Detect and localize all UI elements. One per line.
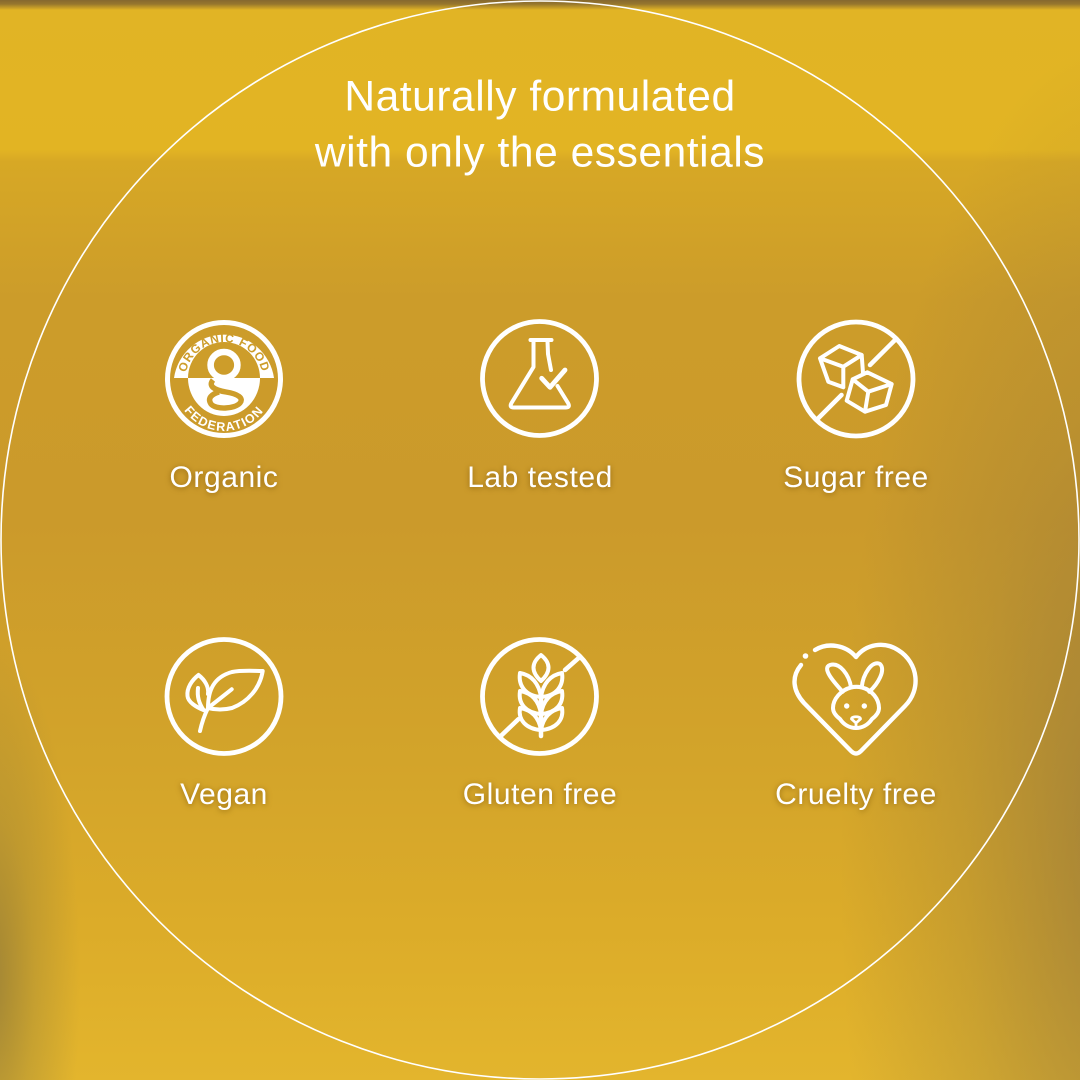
label: lab tested: Lab tested bbox=[467, 461, 613, 494]
icon: leaf bbox=[167, 640, 281, 754]
label: gluten free: Gluten free bbox=[463, 778, 617, 811]
label: sugar free: Sugar free bbox=[783, 461, 929, 494]
title bbox=[314, 74, 765, 176]
icon: flask with check bbox=[482, 322, 596, 436]
icon: crossed wheat bbox=[482, 640, 596, 754]
item: vegan bbox=[167, 640, 281, 811]
icon: organic food federation seal: ORGANIC FOOD bbox=[179, 334, 269, 372]
label: organic: Organic bbox=[170, 461, 278, 494]
label: cruelty free: Cruelty free bbox=[775, 778, 937, 811]
title: Naturally formulated bbox=[344, 74, 736, 120]
icon: organic food federation seal bbox=[165, 320, 283, 438]
item: sugar free bbox=[783, 322, 929, 494]
item: cruelty free bbox=[775, 645, 937, 811]
title: with only the essentials bbox=[314, 130, 765, 176]
icon: rabbit in heart bbox=[795, 645, 916, 754]
item: gluten free bbox=[463, 640, 617, 811]
item: lab tested bbox=[467, 322, 613, 494]
label: vegan: Vegan bbox=[180, 778, 268, 811]
icon: organic food federation seal: FEDERATION bbox=[184, 405, 263, 432]
icon: crossed sugar cubes bbox=[799, 322, 913, 436]
item: organic bbox=[165, 320, 283, 496]
